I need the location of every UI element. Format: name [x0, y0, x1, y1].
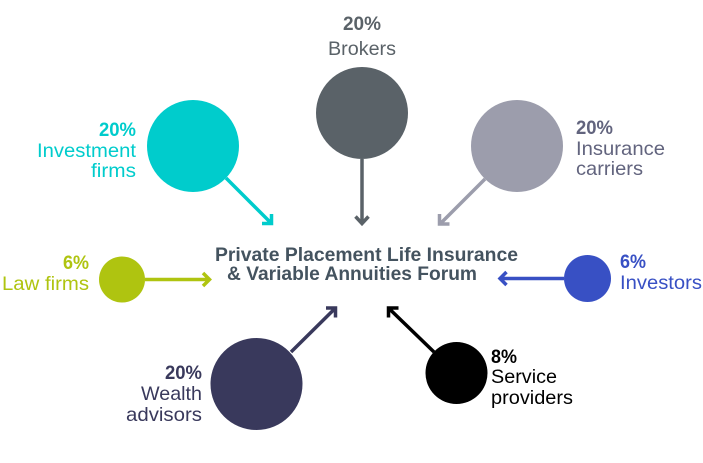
brokers arrow: [356, 159, 368, 224]
law firms label: [2, 253, 89, 295]
investment firms label: firms: [91, 160, 136, 182]
title: [215, 245, 518, 285]
insurance carriers label: [576, 118, 665, 180]
service providers circle: [426, 342, 488, 404]
investment firms label: 20%: [99, 120, 136, 141]
investors arrow: [500, 272, 564, 285]
brokers label: [328, 14, 396, 60]
wealth advisors label: [126, 363, 202, 426]
node: service providers: [388, 308, 573, 409]
insurance carriers label: carriers: [576, 158, 643, 180]
service providers arrow: [388, 308, 434, 352]
node: wealth advisors: [126, 308, 336, 430]
wealth advisors label: advisors: [126, 404, 202, 426]
law firms label: Law firms: [2, 273, 89, 295]
law firms arrow: [145, 273, 210, 286]
brokers label: Brokers: [328, 38, 396, 60]
wealth advisors arrow: [291, 308, 336, 352]
investors label: 6%: [620, 252, 646, 273]
investment firms label: Investment: [37, 140, 137, 162]
insurance carriers label: Insurance: [576, 138, 665, 160]
service providers label: 8%: [491, 347, 517, 368]
brokers circle: [316, 67, 408, 159]
brokers label: 20%: [343, 14, 381, 35]
insurance carriers arrow: [440, 179, 485, 224]
service providers label: [491, 347, 573, 409]
service providers label: Service: [491, 366, 557, 388]
service providers label: providers: [491, 387, 573, 409]
node: insurance carriers: [440, 100, 665, 224]
investment firms label: [37, 120, 137, 182]
law firms circle: [99, 256, 145, 302]
investors label: Investors: [620, 272, 702, 294]
investment firms arrow: [226, 178, 272, 224]
investors label: [620, 252, 702, 294]
insurance carriers label: 20%: [576, 118, 613, 139]
investors circle: [564, 255, 611, 302]
node: law firms: [2, 253, 210, 302]
title: Private Placement Life Insurance: [215, 245, 518, 266]
law firms label: 6%: [63, 253, 89, 274]
wealth advisors label: Wealth: [141, 383, 202, 405]
wealth advisors label: 20%: [165, 363, 202, 384]
node: investment firms: [37, 100, 272, 224]
investment firms circle: [147, 100, 239, 192]
title: & Variable Annuities Forum: [227, 264, 477, 285]
node: brokers: [316, 14, 408, 224]
insurance carriers circle: [471, 100, 563, 192]
wealth advisors circle: [210, 338, 302, 430]
node: investors: [500, 252, 702, 302]
